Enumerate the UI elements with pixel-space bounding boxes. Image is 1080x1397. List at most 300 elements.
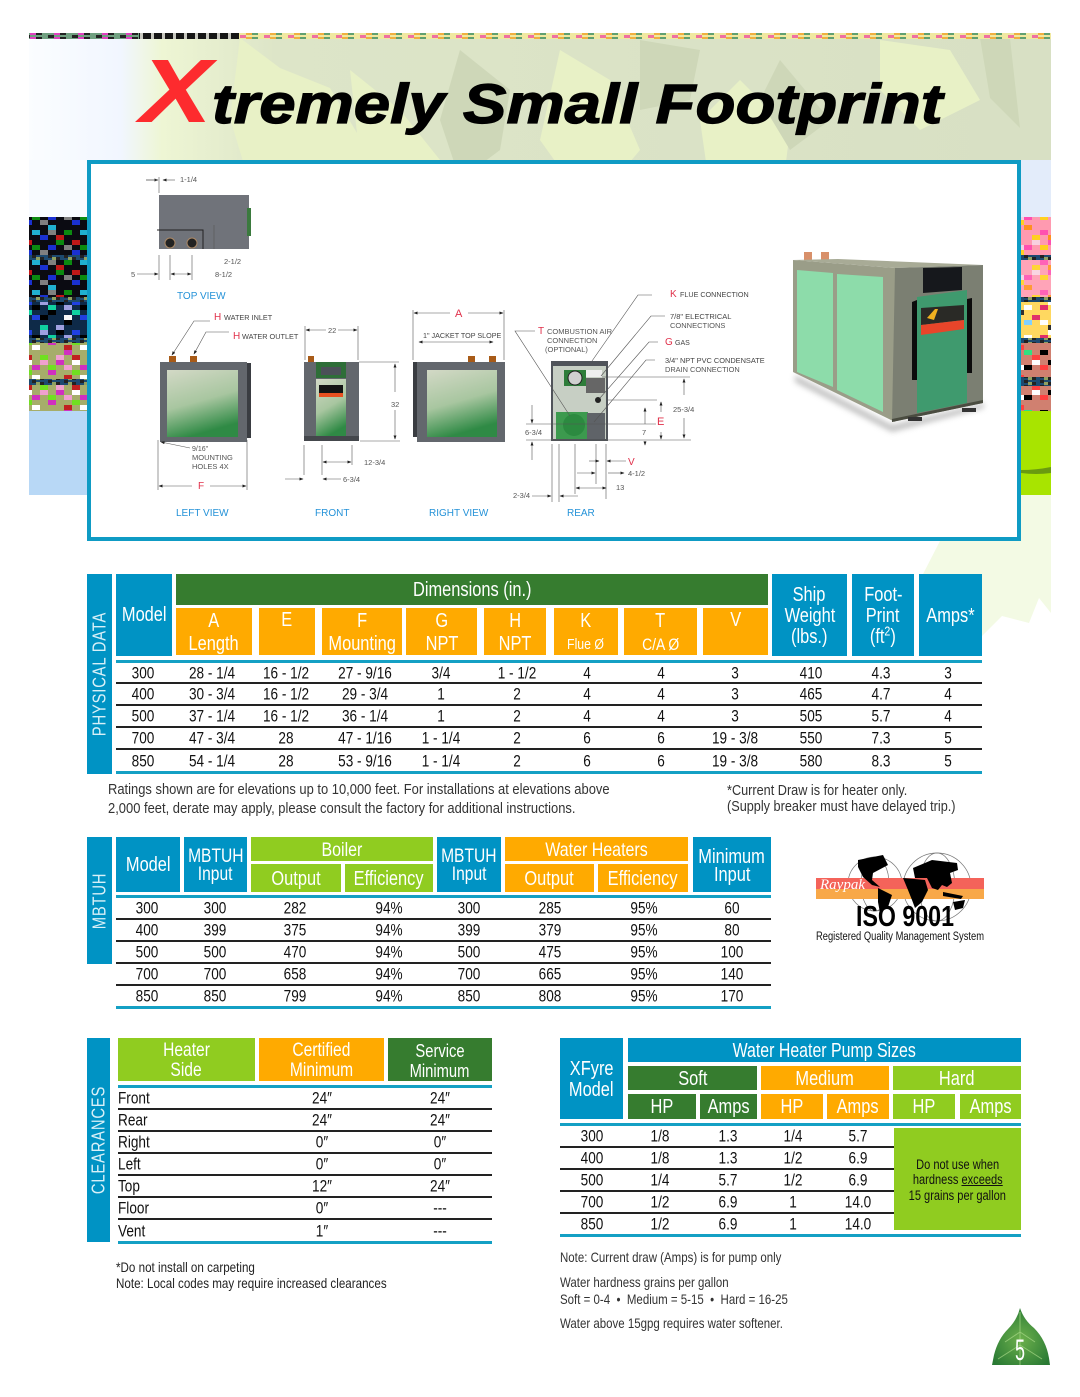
row: model 300: 285 <box>539 898 561 918</box>
row: right: 0″ <box>434 1132 446 1152</box>
header cells: NPT <box>425 632 458 654</box>
row: model 700: 94% <box>375 964 403 984</box>
header: HP and Amps cells: Amps <box>708 1096 749 1118</box>
header cells: Output <box>271 868 321 890</box>
row: model 400: 4 <box>583 684 591 704</box>
header: HP and Amps cells: HP <box>913 1096 935 1118</box>
header cells: Ship <box>793 584 826 606</box>
label: front view: FRONT <box>315 508 349 519</box>
row: model 700 <box>116 728 982 750</box>
row: model 700: 7.3 <box>872 728 890 748</box>
header: hard: Hard <box>939 1068 975 1090</box>
row: model 700: 6.9 <box>719 1192 737 1212</box>
drawing: front view: 6-3/4 <box>343 475 360 484</box>
drawing: top view: 1-1/4 <box>180 175 197 184</box>
row: model 500: 4 <box>583 706 591 726</box>
row: model 400: 399 <box>204 920 226 940</box>
row: model 500: 3 <box>731 706 739 726</box>
note: current draw for pump: Note: Current draw (Amps) is for pump only <box>560 1249 781 1265</box>
label: left view: LEFT VIEW <box>176 508 229 519</box>
note: current draw: (Supply breaker must have delayed trip.) <box>727 798 956 815</box>
row: model 300: 410 <box>800 664 822 682</box>
header cells: G <box>435 610 448 632</box>
row: model 300: 3 <box>944 664 952 682</box>
header cells: F <box>357 610 367 632</box>
row: model 400 <box>116 684 982 706</box>
header: HP and Amps cells: Amps <box>837 1096 879 1118</box>
drawing: top view: 5 <box>131 270 135 279</box>
header cells: NPT <box>499 632 531 654</box>
drawing: rear view: CONNECTIONS <box>670 321 725 330</box>
header cells: V <box>730 609 741 631</box>
row: model 700: 47 - 3/4 <box>189 728 235 748</box>
row: rear: Rear <box>118 1110 147 1130</box>
row: model 850: 2 <box>513 751 521 770</box>
drawing: rear view: 3/4" NPT PVC CONDENSATE <box>665 356 765 365</box>
row: model 850: 850 <box>132 751 154 770</box>
header cells: Minimum <box>699 846 765 868</box>
row: floor <box>118 1198 492 1220</box>
drawing: front view: 12-3/4 <box>364 458 385 467</box>
row: model 700: 1 - 1/4 <box>422 728 460 748</box>
note: elevation ratings: 2,000 feet, derate may apply, please consult the factory for additional instructions. <box>108 800 575 817</box>
row: right: 0″ <box>316 1132 328 1152</box>
header: certified minimum <box>259 1038 384 1081</box>
row: model 400: 80 <box>724 920 740 940</box>
header cells: Foot- <box>864 584 902 606</box>
side label: clearances: CLEARANCES <box>88 1086 108 1194</box>
row: model 700 <box>116 964 771 986</box>
row: model 300: 1/8 <box>651 1126 669 1146</box>
table: water heater pump sizes <box>560 1038 1021 1237</box>
row: model 400: 375 <box>284 920 306 940</box>
row: model 850: 5 <box>944 751 952 770</box>
logo: Raypak ISO 9001: ISO 9001 <box>856 899 954 933</box>
row: model 300 <box>116 898 771 920</box>
row: model 400: 29 - 3/4 <box>342 684 388 704</box>
row: model 300 <box>116 664 982 684</box>
row: model 300: 300 <box>132 664 154 682</box>
row: model 300: 4 <box>657 664 665 682</box>
callout: hard water warning <box>894 1128 1021 1230</box>
row: model 400: 465 <box>800 684 822 704</box>
row: model 700: 1/2 <box>651 1192 669 1212</box>
drawing: front view: 22 <box>328 326 336 335</box>
table: MBTUH <box>87 837 771 1009</box>
row: model 850: 170 <box>721 986 743 1006</box>
row: model 700: 95% <box>630 964 658 984</box>
header: HP and Amps cells <box>628 1094 1021 1119</box>
row: model 300: 1/4 <box>784 1126 802 1146</box>
row: model 400: 6.9 <box>849 1148 867 1168</box>
row: model 400: 3 <box>731 684 739 704</box>
header cells: T <box>655 610 666 632</box>
drawing: top view: 8-1/2 <box>215 270 232 279</box>
row: model 700: 47 - 1/16 <box>338 728 392 748</box>
side label: clearances <box>87 1038 110 1242</box>
row: model 700: 5 <box>944 728 952 748</box>
row: top <box>118 1176 492 1198</box>
header cells: Model <box>126 854 170 876</box>
row: model 850: 1 <box>789 1214 797 1234</box>
header: heater side <box>118 1038 255 1081</box>
drawing: rear view: 13 <box>616 483 624 492</box>
row: model 500: 36 - 1/4 <box>342 706 388 726</box>
row: model 700: 700 <box>132 728 154 748</box>
header: HP and Amps cells: Amps <box>970 1096 1011 1118</box>
row: model 500: 500 <box>136 942 158 962</box>
row: model 400: 4 <box>657 684 665 704</box>
note: elevation ratings: Ratings shown are for elevations up to 10,000 feet. For installations at elevations above <box>108 781 610 798</box>
header cells: Boiler <box>322 838 362 860</box>
row: model 500: 1 <box>437 706 445 726</box>
row: model 400: 1.3 <box>719 1148 737 1168</box>
header: hard <box>893 1066 1021 1090</box>
row: left: Left <box>118 1154 141 1174</box>
row: model 300: 3/4 <box>432 664 450 682</box>
logo: Raypak ISO 9001: Raypak <box>819 877 865 893</box>
header: heater side: Side <box>171 1060 202 1080</box>
header cells: Input <box>714 864 750 886</box>
row: model 850: 1 - 1/4 <box>422 751 460 770</box>
row: model 500: 4 <box>657 706 665 726</box>
header cells <box>116 574 982 656</box>
row: top: Top <box>118 1176 140 1196</box>
row: model 850: 54 - 1/4 <box>189 751 235 770</box>
row: model 300: 3 <box>731 664 739 682</box>
row: model 850: 53 - 9/16 <box>338 751 392 770</box>
row: model 500: 505 <box>800 706 822 726</box>
row: model 300: 5.7 <box>849 1126 867 1146</box>
drawing: rear view: G <box>665 337 673 348</box>
row: model 500: 500 <box>458 942 480 962</box>
row: model 700: 28 <box>278 728 294 748</box>
drawing: left view: H <box>214 312 221 323</box>
row: front: Front <box>118 1088 150 1108</box>
header cells: Length <box>189 632 239 654</box>
row: model 850: 850 <box>204 986 226 1006</box>
row: model 850: 1/2 <box>651 1214 669 1234</box>
header cells: Dimensions (in.) <box>413 579 531 601</box>
row: model 400: 95% <box>630 920 658 940</box>
row: model 500: 475 <box>539 942 561 962</box>
row: model 300: 4 <box>583 664 591 682</box>
header cells: Efficiency <box>354 868 424 890</box>
header cells: H <box>509 610 521 632</box>
row: model 400 <box>560 1148 894 1170</box>
row: top: 12″ <box>312 1176 332 1196</box>
row: model 500: 16 - 1/2 <box>263 706 309 726</box>
drawing: left view: HOLES 4X <box>192 462 229 471</box>
row: model 500: 470 <box>284 942 306 962</box>
row: model 700: 6 <box>583 728 591 748</box>
row: model 700: 14.0 <box>845 1192 871 1212</box>
drawing: top view: 2-1/2 <box>224 257 241 266</box>
table: clearances <box>87 1038 492 1244</box>
header cells: C/A Ø <box>642 634 679 654</box>
row: model 850: 8.3 <box>872 751 890 770</box>
row: model 300: 94% <box>375 898 403 918</box>
panel: dimension drawings and product photo <box>87 160 1021 541</box>
row: model 400: 4.7 <box>872 684 890 704</box>
drawing: left view: MOUNTING <box>192 453 233 462</box>
row: top: 24″ <box>430 1176 450 1196</box>
drawing: rear view: 4-1/2 <box>628 469 645 478</box>
row: model 850: 799 <box>284 986 306 1006</box>
header: soft: Soft <box>678 1068 707 1090</box>
row: model 300: 4.3 <box>872 664 890 682</box>
row: model 300: 28 - 1/4 <box>189 664 235 682</box>
drawing: rear view: DRAIN CONNECTION <box>665 365 740 374</box>
title words: tremely Small Footprint <box>212 72 943 135</box>
header cells <box>116 837 771 892</box>
row: model 700: 700 <box>204 964 226 984</box>
row: model 500: 1/2 <box>784 1170 802 1190</box>
row: model 850: 6.9 <box>719 1214 737 1234</box>
row: model 400: 1 <box>437 684 445 704</box>
header cells: K <box>581 610 591 632</box>
row: model 400: 94% <box>375 920 403 940</box>
row: model 850: 19 - 3/8 <box>712 751 758 770</box>
drawing: rear view: 2-3/4 <box>513 491 530 500</box>
header cells: Water Heaters <box>545 838 648 860</box>
row: model 700: 6 <box>657 728 665 748</box>
row: rear <box>118 1110 492 1132</box>
row: model 400: 400 <box>136 920 158 940</box>
header cells: A <box>209 610 219 632</box>
row: model 850: 850 <box>458 986 480 1006</box>
drawing: left view: WATER OUTLET <box>242 332 299 341</box>
row: model 300: 16 - 1/2 <box>263 664 309 682</box>
row: left: 0″ <box>316 1154 328 1174</box>
header cells: (lbs.) <box>791 626 828 648</box>
row: model 500: 5.7 <box>719 1170 737 1190</box>
row: vent: 1″ <box>316 1221 328 1240</box>
callout: hard water warning: Do not use when <box>916 1157 999 1172</box>
row: model 850 <box>136 986 743 1006</box>
row: model 850: 94% <box>375 986 403 1006</box>
row: model 850: 580 <box>800 751 822 770</box>
row: left: 0″ <box>434 1154 446 1174</box>
row: model 850 <box>581 1214 871 1234</box>
row: model 400: 30 - 3/4 <box>189 684 235 704</box>
side label: MBTUH <box>87 837 112 964</box>
drawing: right view: A <box>455 308 463 320</box>
row: model 700: 550 <box>800 728 822 748</box>
title: Xtremely Small Footprint <box>135 42 946 142</box>
row: model 500: 500 <box>581 1170 603 1190</box>
row: model 400: 16 - 1/2 <box>263 684 309 704</box>
row: model 700: 2 <box>513 728 521 748</box>
drawing: rear view: T <box>538 326 544 337</box>
row: model 850: 14.0 <box>845 1214 871 1234</box>
drawing: front view: 32 <box>391 400 399 409</box>
header cells: MBTUH <box>441 846 497 866</box>
drawing: left view <box>158 312 299 492</box>
header: heater side: Heater <box>163 1040 210 1060</box>
note: clearances: *Do not install on carpeting <box>116 1259 255 1275</box>
row: model 700: 665 <box>539 964 561 984</box>
header: service minimum <box>388 1038 492 1081</box>
row: model 400 <box>116 920 771 942</box>
header: HP and Amps cells: HP <box>781 1096 803 1118</box>
row: model 500: 4 <box>944 706 952 726</box>
drawing: right view: 1" JACKET TOP SLOPE <box>423 331 502 340</box>
note: clearances <box>116 1259 387 1291</box>
row: model 850: 808 <box>539 986 561 1006</box>
drawing: rear view: COMBUSTION AIR <box>547 327 613 336</box>
side label: MBTUH: MBTUH <box>89 872 109 929</box>
row: model 500: 6.9 <box>849 1170 867 1190</box>
note: clearances: Note: Local codes may require increased clearances <box>116 1274 387 1290</box>
row: model 500: 500 <box>132 706 154 726</box>
header: service minimum: Service <box>415 1040 465 1060</box>
drawing: top view <box>131 175 251 280</box>
side label: physical data <box>87 574 112 774</box>
row: front: 24″ <box>430 1088 450 1108</box>
top noise bar <box>29 33 139 39</box>
row: model 850: 850 <box>581 1214 603 1234</box>
row: right <box>118 1132 492 1154</box>
drawing: front view <box>285 326 400 484</box>
header cells: Weight <box>784 604 835 626</box>
left strip <box>29 217 87 259</box>
row: right: Right <box>118 1132 150 1152</box>
row: model 400: 379 <box>539 920 561 940</box>
row: rear: 24″ <box>312 1110 332 1130</box>
drawing: rear view: 25-3/4 <box>673 405 694 414</box>
drawing: left view: H <box>233 331 240 342</box>
header cells: Flue Ø <box>568 636 604 652</box>
row: model 300: 300 <box>581 1126 603 1146</box>
row: model 500 <box>116 706 982 728</box>
row: vent: Vent <box>118 1221 145 1240</box>
note: water hardness <box>560 1274 788 1306</box>
row: model 700: 1 <box>789 1192 797 1212</box>
note: pump notes <box>560 1249 788 1331</box>
row: model 700 <box>560 1192 894 1214</box>
row: model 300: 27 - 9/16 <box>338 664 392 682</box>
row: model 500 <box>116 942 771 964</box>
row: model 500: 2 <box>513 706 521 726</box>
right strip <box>1021 217 1051 259</box>
row: model 300 <box>560 1126 894 1148</box>
drawing: rear view: 6-3/4 <box>525 428 542 437</box>
row: model 700: 19 - 3/8 <box>712 728 758 748</box>
row: front: 24″ <box>312 1088 332 1108</box>
row: model 300: 60 <box>724 898 740 918</box>
note: softener: Water above 15gpg requires water softener. <box>560 1315 783 1331</box>
header cells: Print <box>866 604 900 626</box>
row: model 500: 95% <box>630 942 658 962</box>
title initial X: X <box>140 42 212 142</box>
note: current draw: *Current Draw is for heater only. <box>727 782 907 799</box>
row: model 850: 850 <box>136 986 158 1006</box>
drawing: left view: WATER INLET <box>224 313 273 322</box>
row: model 850: 95% <box>630 986 658 1006</box>
icon: leaf page number: 5 <box>1015 1335 1025 1367</box>
row: model 500 <box>560 1170 894 1192</box>
row: model 300: 1.3 <box>719 1126 737 1146</box>
header: medium <box>761 1066 889 1090</box>
row: model 700: 700 <box>458 964 480 984</box>
drawing: rear view: (OPTIONAL) <box>545 345 588 354</box>
drawing: rear view <box>513 289 765 502</box>
header: pump sizes <box>628 1038 1021 1062</box>
header: certified minimum: Certified <box>292 1040 351 1060</box>
header cells: Output <box>525 868 574 890</box>
header: medium: Medium <box>796 1068 854 1090</box>
note: current draw <box>727 782 956 815</box>
row: model 400: 1/8 <box>651 1148 669 1168</box>
header: service minimum: Minimum <box>410 1060 470 1080</box>
row: model 400: 4 <box>944 684 952 704</box>
row: model 500: 94% <box>375 942 403 962</box>
row: model 400: 400 <box>581 1148 603 1168</box>
row: model 500: 37 - 1/4 <box>189 706 235 726</box>
header: XFyre model: XFyre <box>570 1058 613 1080</box>
header cells: Mounting <box>328 632 396 654</box>
header: pump sizes: Water Heater Pump Sizes <box>733 1040 916 1062</box>
drawing: left view: F <box>198 481 204 492</box>
row: floor: --- <box>433 1198 447 1218</box>
callout: hard water warning: hardness exceeds <box>913 1172 1002 1187</box>
row: model 300: 300 <box>458 898 480 918</box>
header cells: Efficiency <box>608 868 678 890</box>
icon: leaf page number <box>992 1308 1050 1367</box>
row: model 300: 95% <box>630 898 658 918</box>
drawing: rear view: GAS <box>675 340 690 347</box>
row: floor: 0″ <box>316 1198 328 1218</box>
pale leaf <box>922 495 1051 636</box>
header: HP and Amps cells: HP <box>651 1096 673 1118</box>
row: model 500: 5.7 <box>872 706 890 726</box>
header cells: (ft2) <box>870 623 896 648</box>
drawing: rear view: K <box>670 289 677 300</box>
callout: hard water warning: 15 grains per gallon <box>909 1188 1006 1203</box>
row: model 850 <box>132 751 952 770</box>
row: front <box>118 1088 492 1110</box>
row: model 500: 100 <box>721 942 743 962</box>
header: certified minimum: Minimum <box>290 1060 353 1080</box>
row: model 700: 140 <box>721 964 743 984</box>
row: model 300: 300 <box>204 898 226 918</box>
logo: Raypak ISO 9001 <box>816 852 984 943</box>
drawing: rear view: V <box>628 457 635 468</box>
row: model 300: 282 <box>284 898 306 918</box>
header cells: Input <box>198 864 233 884</box>
row: model 500: 500 <box>204 942 226 962</box>
side label: physical data: PHYSICAL DATA <box>89 612 109 736</box>
drawing: rear view: 7/8" ELECTRICAL <box>670 312 731 321</box>
row: model 400: 2 <box>513 684 521 704</box>
row: vent <box>118 1221 447 1240</box>
row: model 400: 400 <box>132 684 154 704</box>
note: elevation ratings <box>108 781 610 817</box>
drawing: rear view: E <box>657 416 664 428</box>
row: vent: --- <box>433 1221 447 1240</box>
row: floor: Floor <box>118 1198 149 1218</box>
note: water hardness: Soft = 0-4 • Medium = 5-15 • Hard = 16-25 <box>560 1290 788 1306</box>
header cells: Input <box>452 864 486 884</box>
row: model 700: 700 <box>136 964 158 984</box>
row: left <box>118 1154 492 1176</box>
label: top view: TOP VIEW <box>177 291 226 302</box>
drawing: left view: 9/16" <box>192 446 209 453</box>
drawing: rear view: 7 <box>642 428 646 437</box>
drawing: right view <box>413 308 505 442</box>
row: model 850: 6 <box>657 751 665 770</box>
